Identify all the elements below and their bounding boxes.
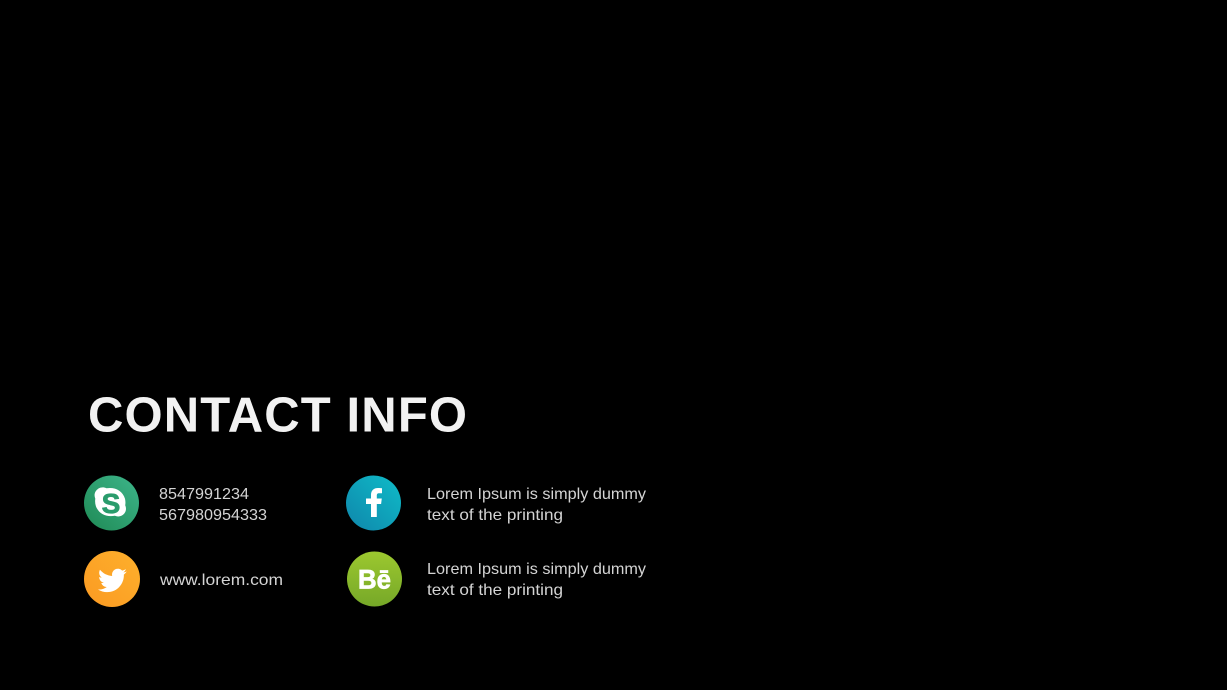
phone numbers: 8547991234	[159, 486, 249, 503]
contact item: skype	[84, 476, 267, 530]
description: text of the printing	[427, 582, 563, 599]
title: CONTACT INFO	[88, 388, 467, 442]
phone numbers	[159, 486, 267, 524]
website: www.lorem.com	[159, 572, 283, 589]
contact item: behance	[347, 552, 646, 606]
icon: facebook	[346, 476, 401, 530]
phone numbers: 567980954333	[159, 507, 267, 524]
description: Lorem Ipsum is simply dummy	[427, 486, 646, 503]
icon: skype: S	[102, 488, 120, 519]
icon: twitter	[84, 551, 140, 607]
icon: skype	[84, 476, 139, 530]
contact item: facebook	[346, 476, 646, 530]
description: text of the printing	[427, 507, 563, 524]
icon: behance	[347, 552, 402, 606]
icon: behance: Bē	[358, 564, 391, 594]
contact item: twitter	[84, 551, 283, 607]
description	[427, 486, 646, 524]
description	[427, 561, 646, 599]
description: Lorem Ipsum is simply dummy	[427, 561, 646, 578]
